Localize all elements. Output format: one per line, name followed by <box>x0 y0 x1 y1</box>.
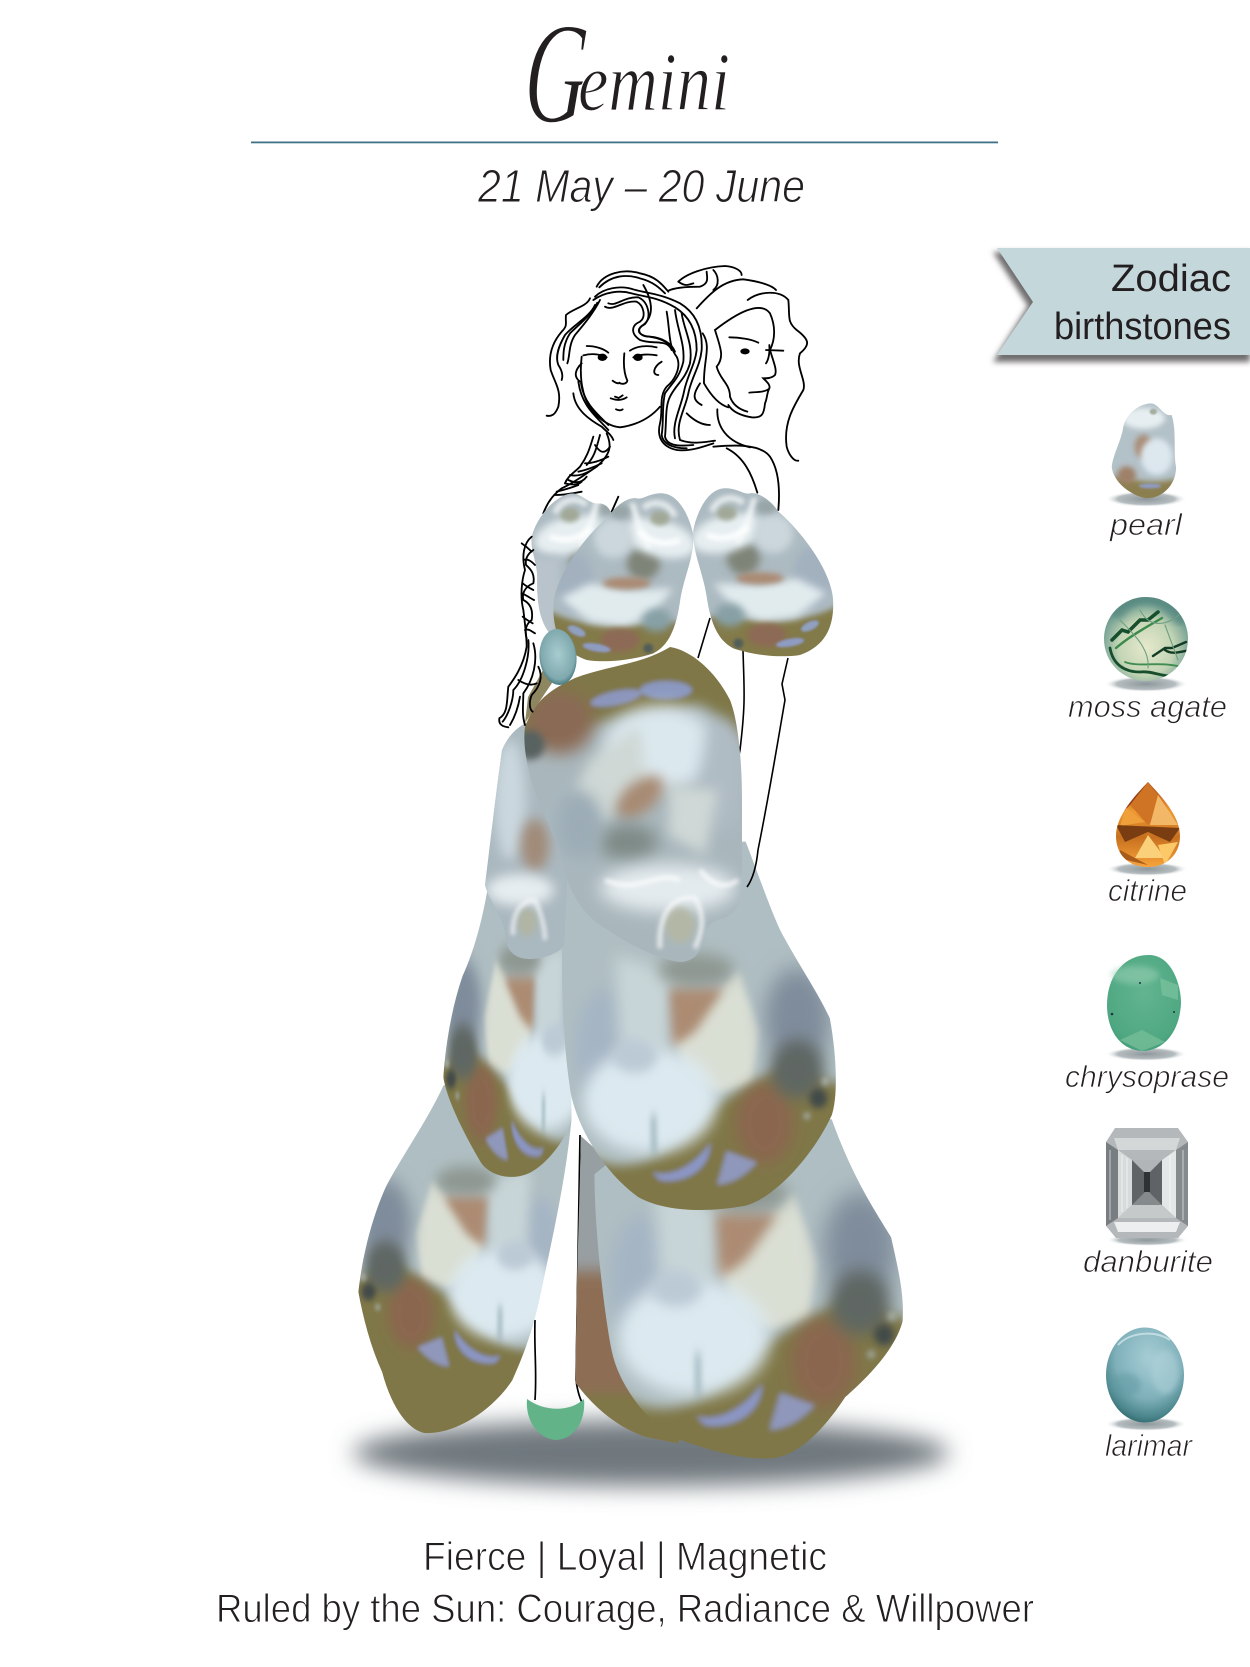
front head hair <box>547 271 715 450</box>
pearl: back sleeve <box>532 493 611 632</box>
figure: line art heads and hair <box>543 266 807 513</box>
tagline: traits: Fierce | Loyal | Magnetic <box>423 1535 827 1579</box>
pearl: right sleeve <box>693 488 834 656</box>
stone: larimar <box>1105 1328 1194 1463</box>
pearl: upper left <box>443 892 572 1177</box>
stone: moss agate <box>1068 597 1227 724</box>
ribbon: Zodiac birthstones <box>993 248 1250 362</box>
stone: danburite <box>1083 1128 1213 1279</box>
ribbon: Zodiac birthstones: Zodiac <box>1111 258 1231 300</box>
ribbon: Zodiac birthstones: birthstones <box>1054 306 1231 348</box>
pearl: lower left <box>358 1085 572 1434</box>
label: larimar: larimar <box>1105 1428 1194 1463</box>
label: citrine: citrine <box>1108 873 1187 908</box>
front face <box>581 346 660 427</box>
title rule <box>251 142 998 143</box>
tagline: ruling planet: Ruled by the Sun: Courage, Radiance & Willpower <box>216 1587 1034 1631</box>
stone: chrysoprase <box>1065 955 1229 1094</box>
figure: belt larimar stone <box>537 627 579 687</box>
figure: pearl sleeve lower left <box>485 722 562 960</box>
figure: pearl sliver behind braid <box>525 670 552 723</box>
stone: pearl <box>1109 404 1183 542</box>
pearl: upper right <box>562 842 836 1210</box>
title: Gemini <box>520 0 730 153</box>
figure: arm and back lines <box>698 618 788 887</box>
label: chrysoprase: chrysoprase <box>1065 1059 1229 1094</box>
ground shadow <box>353 1420 949 1486</box>
pearl: lower right <box>594 1119 903 1458</box>
date range: 21 May – 20 June <box>477 160 805 212</box>
figure: pearl sleeves and bodice <box>523 477 847 675</box>
figure: pearl hip <box>524 647 742 962</box>
back head <box>668 266 807 510</box>
figure: legs line art <box>535 1135 583 1405</box>
figure: pearl gown skirt <box>308 787 970 1617</box>
figure: shoe chrysoprase <box>527 1399 584 1440</box>
label: danburite: danburite <box>1083 1244 1213 1279</box>
upper braid <box>543 433 618 513</box>
pearl: centre bodice <box>554 493 694 662</box>
label: moss agate: moss agate <box>1068 689 1227 724</box>
stone: citrine <box>1109 782 1186 901</box>
label: pearl: pearl <box>1109 507 1183 542</box>
figure: lower braid <box>499 537 541 727</box>
title: Gemini: emini <box>578 36 730 129</box>
pearl: back lower panel <box>575 1136 679 1444</box>
